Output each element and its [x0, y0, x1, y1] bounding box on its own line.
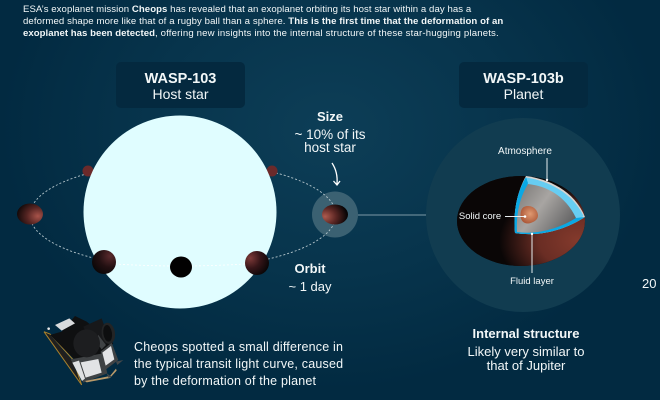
host star: [84, 116, 276, 308]
planet behind the star, right: [266, 166, 278, 176]
structure halo: [426, 118, 620, 312]
internal structure caption: Likely very similar to: [467, 344, 585, 359]
arrow to inset: [332, 163, 340, 185]
planet front right: [245, 251, 269, 275]
label: WASP-103 host star: [116, 62, 245, 108]
intro text: exoplanet has been detected, offering new insights into the internal structure of these star-hugging planets.: [23, 28, 499, 39]
solid core: [520, 206, 538, 224]
leader dot: core: [524, 215, 526, 218]
outer silver edge: [514, 176, 585, 234]
internal structure caption: Internal structure: [473, 326, 579, 341]
fluid layer label: Fluid layer: [510, 276, 554, 287]
label: WASP-103b planet: Planet: [504, 86, 543, 102]
orbit path: [30, 162, 336, 268]
intro text: [23, 4, 503, 39]
internal structure caption: [467, 326, 585, 373]
leader dot: atmosphere: [546, 179, 548, 181]
Cheops description: [134, 340, 343, 388]
label: WASP-103 host star: Host star: [152, 86, 208, 102]
page number: 20: [642, 276, 656, 291]
orbit callout: ~ 1 day: [288, 279, 332, 294]
size callout: Size: [317, 109, 343, 124]
orbit dashes across star: [115, 264, 245, 266]
icon: Cheops spacecraft: [44, 316, 123, 385]
Cheops description: the typical transit light curve, caused: [134, 357, 343, 371]
inner grey section: [517, 184, 576, 233]
planet behind the star, left: [82, 166, 94, 176]
orbit callout: Orbit: [294, 261, 326, 276]
planet in transit: [170, 256, 192, 278]
planet front left: [92, 250, 116, 274]
size callout: host star: [304, 140, 356, 155]
size callout: [295, 109, 365, 155]
structure leader lines: [505, 158, 547, 273]
leader dot: fluid layer: [531, 233, 533, 235]
intro text: ESA’s exoplanet mission Cheops has revealed that an exoplanet orbiting its host star within a day has a: [23, 4, 471, 14]
fluid layer: [514, 177, 585, 234]
planet cutaway: [457, 176, 585, 266]
Cheops description: by the deformation of the planet: [134, 374, 316, 388]
solid core label: Solid core: [459, 211, 501, 222]
planet at far right: [322, 204, 348, 224]
planet at far left: [17, 204, 43, 224]
label: WASP-103 host star: WASP-103: [145, 70, 216, 86]
internal structure caption: that of Jupiter: [487, 358, 565, 373]
label: WASP-103b planet: WASP-103b: [483, 70, 564, 86]
label: WASP-103b planet: [459, 62, 588, 108]
intro text: deformed shape more like that of a rugby ball than a sphere. This is the first time that the deformation of an: [23, 16, 503, 27]
inset halo around planet: [312, 192, 358, 238]
size callout: ~ 10% of its: [295, 126, 365, 142]
connector line: [358, 214, 426, 216]
atmosphere label: Atmosphere: [498, 146, 552, 156]
Cheops description: Cheops spotted a small difference in: [134, 340, 343, 354]
atmosphere layer: [514, 178, 584, 234]
orbit callout: [288, 261, 332, 294]
